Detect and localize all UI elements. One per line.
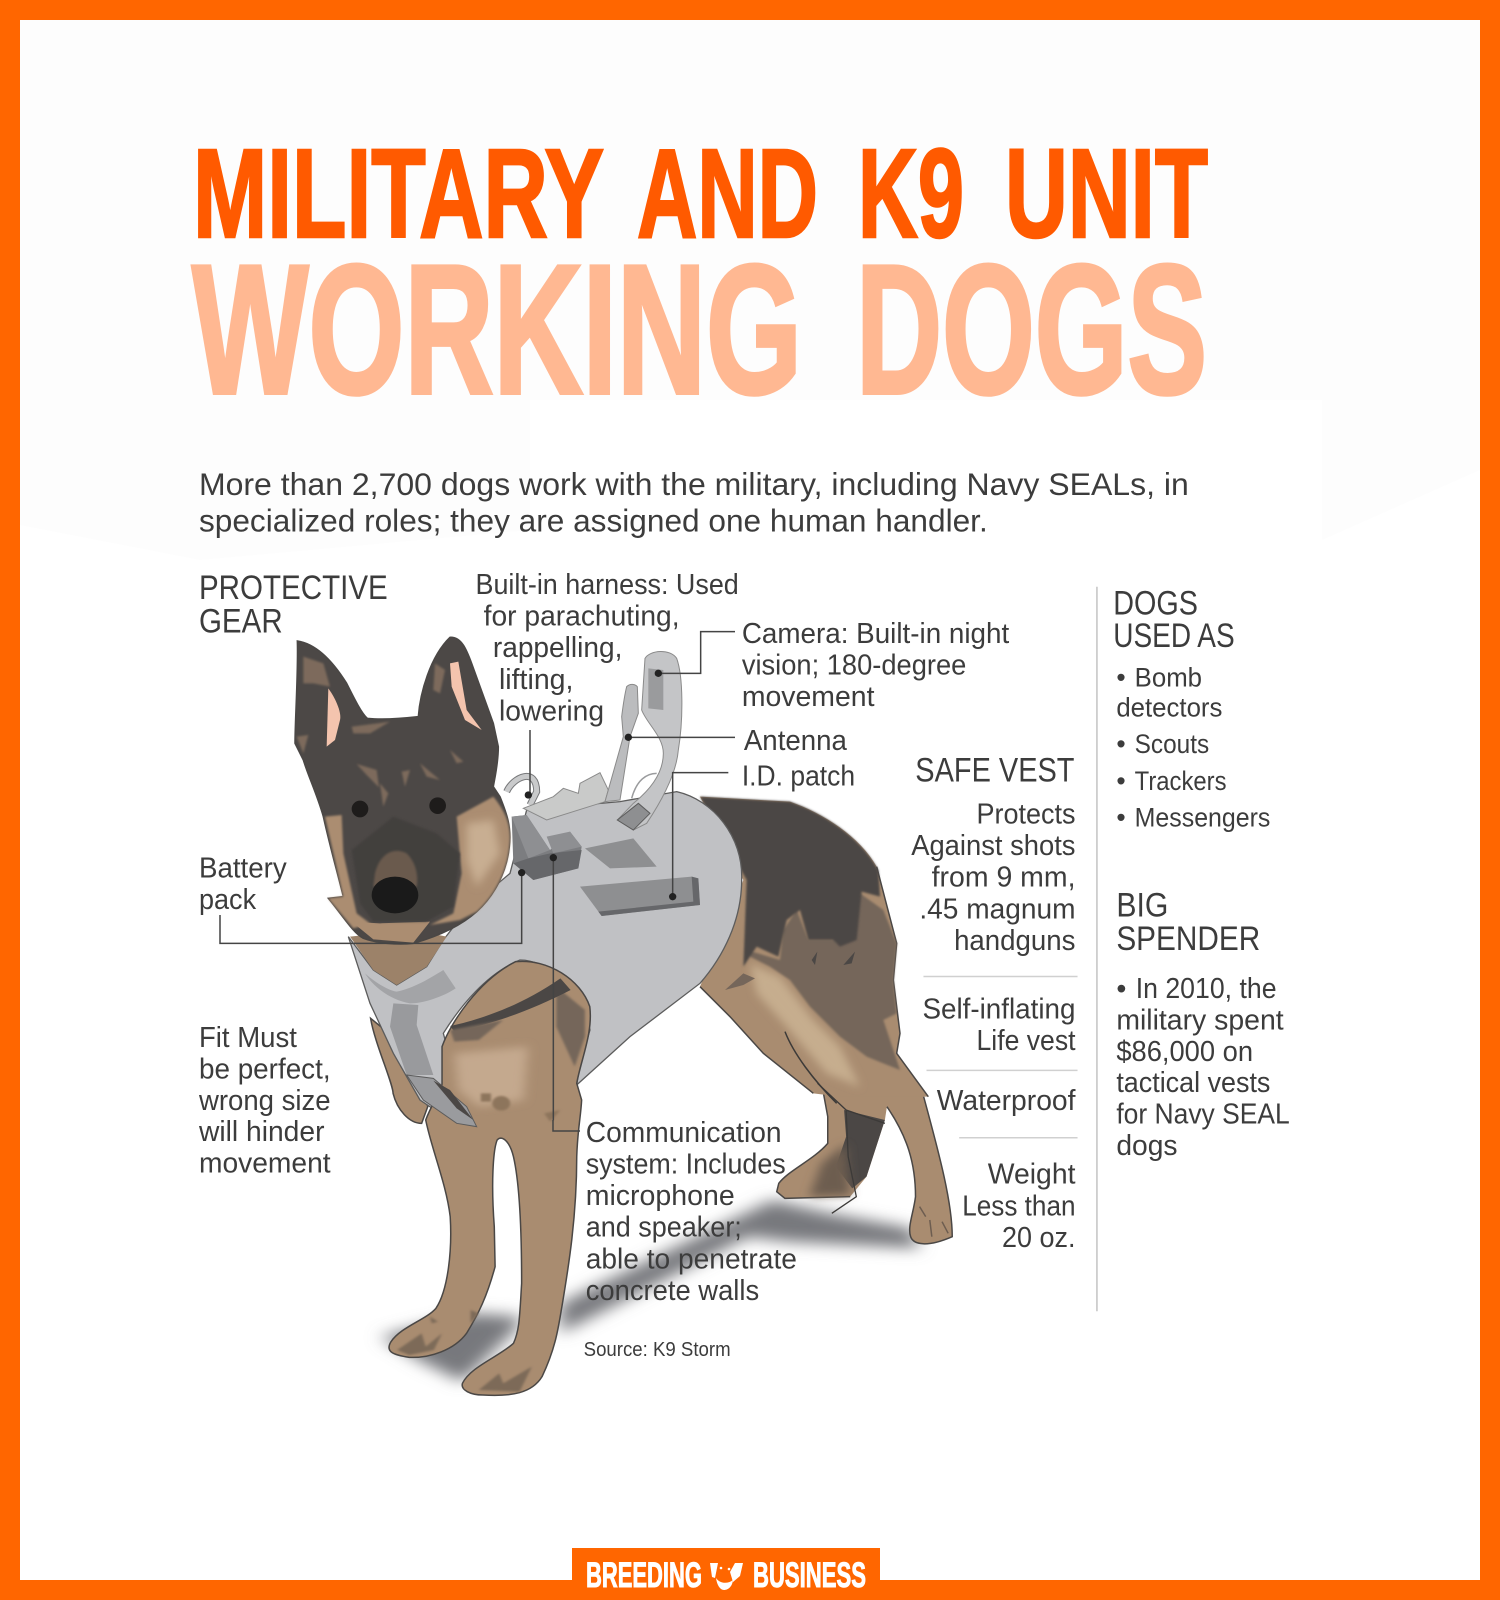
title line 1: K9 xyxy=(858,123,964,264)
muzzle xyxy=(352,817,460,922)
vest life vest text: Self-inflating xyxy=(922,993,1076,1025)
heading: dogs used as: DOGS xyxy=(1113,584,1198,622)
intro paragraph: specialized roles; they are assigned one human handler. xyxy=(199,503,988,539)
list of dog roles: • xyxy=(1116,803,1126,833)
label: communication system xyxy=(586,1117,797,1307)
list of dog roles: detectors xyxy=(1116,692,1222,722)
label: built-in harness: lifting, xyxy=(499,664,573,696)
heading: protective gear xyxy=(199,569,388,641)
heading: dogs used as: USED AS xyxy=(1113,617,1235,655)
vest protection text: Against shots xyxy=(911,830,1076,862)
vest weight text xyxy=(962,1159,1076,1254)
list of dog roles: Bomb xyxy=(1135,663,1202,693)
heading: big spender: BIG xyxy=(1116,886,1168,924)
vest protection text: .45 magnum xyxy=(919,893,1076,925)
list of dog roles: • xyxy=(1116,729,1126,759)
label: antenna: Antenna xyxy=(744,725,847,757)
battery pack block xyxy=(512,815,582,880)
title line 1: AND xyxy=(637,123,818,264)
faint upper background tint xyxy=(20,20,1480,560)
title line 1: MILITARY xyxy=(193,123,604,264)
list of dog roles: Trackers xyxy=(1135,766,1227,796)
label: communication system: Communication xyxy=(586,1117,782,1149)
label: built-in harness: lowering xyxy=(499,695,604,727)
footer logo tab xyxy=(572,1548,880,1600)
label: battery pack: Battery xyxy=(199,853,287,885)
source note: Source: K9 Storm xyxy=(584,1339,731,1361)
spending text xyxy=(1116,973,1290,1162)
label: built-in harness: rappelling, xyxy=(493,632,622,664)
spending text: dogs xyxy=(1116,1130,1178,1162)
vest body xyxy=(348,792,742,1127)
ground shadow xyxy=(381,1200,920,1382)
text annotations xyxy=(198,569,1290,1361)
label: communication system: and speaker; xyxy=(586,1212,742,1244)
hind leg lower xyxy=(777,1050,952,1244)
list of dog roles: • xyxy=(1116,663,1126,693)
label: built-in harness xyxy=(476,569,739,727)
title line 2: WORKING xyxy=(192,226,802,432)
list of dog roles xyxy=(1116,663,1270,833)
paw toes xyxy=(397,1310,479,1355)
leader lines and dots xyxy=(220,632,735,1120)
label: camera xyxy=(742,618,1009,713)
label: battery pack: pack xyxy=(199,884,257,916)
spending text: $86,000 on xyxy=(1116,1036,1253,1068)
note: fit: wrong size xyxy=(198,1085,331,1117)
intro paragraph xyxy=(199,466,1189,539)
list of dog roles: Messengers xyxy=(1135,803,1270,833)
nose xyxy=(372,877,418,913)
panel: dogs used as xyxy=(1113,584,1270,833)
logo word: breeding: BREEDING xyxy=(586,1556,702,1595)
title line 2: DOGS xyxy=(856,226,1207,432)
illustration: German shepherd in tactical vest xyxy=(220,632,952,1395)
far front leg xyxy=(371,1018,428,1123)
intro paragraph: More than 2,700 dogs work with the military, including Navy SEALs, in xyxy=(199,466,1189,502)
chin xyxy=(352,922,430,943)
label: battery pack xyxy=(199,853,287,916)
title line 1 xyxy=(193,123,1208,264)
left cheek xyxy=(325,815,370,928)
spending text: military spent xyxy=(1116,1005,1284,1037)
top gear: harness, antenna, camera xyxy=(507,651,682,830)
heading: dogs used as xyxy=(1113,584,1235,655)
spending text: tactical vests xyxy=(1116,1067,1270,1099)
front leg xyxy=(389,961,590,1395)
vest weight text: Weight xyxy=(988,1159,1076,1191)
panel: safe vest xyxy=(911,752,1078,1254)
label: built-in harness: for parachuting, xyxy=(484,601,680,633)
vest pockets and I.D. patch xyxy=(580,838,700,916)
heading: protective gear: GEAR xyxy=(199,603,283,641)
antenna xyxy=(605,684,638,802)
logo word: business: BUSINESS xyxy=(753,1556,866,1595)
right cheek xyxy=(430,797,510,925)
label: communication system: able to penetrate xyxy=(586,1243,797,1275)
vest life vest text: Life vest xyxy=(977,1025,1076,1057)
inner ears xyxy=(327,688,340,747)
heading: safe vest: SAFE VEST xyxy=(915,752,1074,790)
vest weight text: 20 oz. xyxy=(1002,1222,1076,1254)
harness loop xyxy=(507,776,537,805)
title line 1: UNIT xyxy=(1005,123,1208,264)
label: camera: Camera: Built-in night xyxy=(742,618,1009,650)
vest waterproof text: Waterproof xyxy=(937,1085,1076,1117)
spending text: In 2010, the xyxy=(1136,973,1277,1005)
vest protection text: Protects xyxy=(977,798,1076,830)
hind body and saddle xyxy=(700,797,928,1103)
note: fit: movement xyxy=(199,1147,331,1179)
label: communication system: system: Includes xyxy=(586,1148,786,1180)
eyes xyxy=(352,801,368,817)
note: fit: will hinder xyxy=(198,1116,325,1148)
vest protection text: handguns xyxy=(954,925,1076,957)
label: camera: vision; 180-degree xyxy=(742,649,966,681)
vest protection text: from 9 mm, xyxy=(932,862,1076,894)
heading: big spender: SPENDER xyxy=(1116,920,1260,958)
hind leg strap line xyxy=(818,1083,885,1213)
panel: big spender xyxy=(1116,886,1290,1162)
spending text: • xyxy=(1116,973,1126,1005)
label: I.D. patch: I.D. patch xyxy=(742,761,855,793)
label: built-in harness: Built-in harness: Used xyxy=(476,569,739,601)
label: communication system: concrete walls xyxy=(586,1275,759,1307)
spending text: for Navy SEAL xyxy=(1116,1098,1290,1130)
label: camera: movement xyxy=(742,681,875,713)
note: fit: Fit Must xyxy=(199,1022,297,1054)
heading: protective gear: PROTECTIVE xyxy=(199,569,388,607)
ear and forehead markings xyxy=(297,657,463,807)
vest protection text xyxy=(911,798,1076,957)
vest weight text: Less than xyxy=(962,1190,1076,1222)
communication leader foot xyxy=(553,1120,580,1131)
vest lower strap xyxy=(407,1075,477,1127)
list of dog roles: Scouts xyxy=(1135,729,1209,759)
vest life vest text xyxy=(922,993,1076,1057)
title xyxy=(192,123,1208,432)
dog head xyxy=(295,637,510,944)
list of dog roles: • xyxy=(1116,766,1126,796)
note: fit xyxy=(198,1022,331,1179)
heading: big spender xyxy=(1116,886,1260,958)
label: communication system: microphone xyxy=(586,1180,735,1212)
harness pads xyxy=(523,773,608,820)
camera arm xyxy=(617,651,682,830)
icon: dog face logo xyxy=(710,1563,743,1590)
note: fit: be perfect, xyxy=(199,1054,331,1086)
